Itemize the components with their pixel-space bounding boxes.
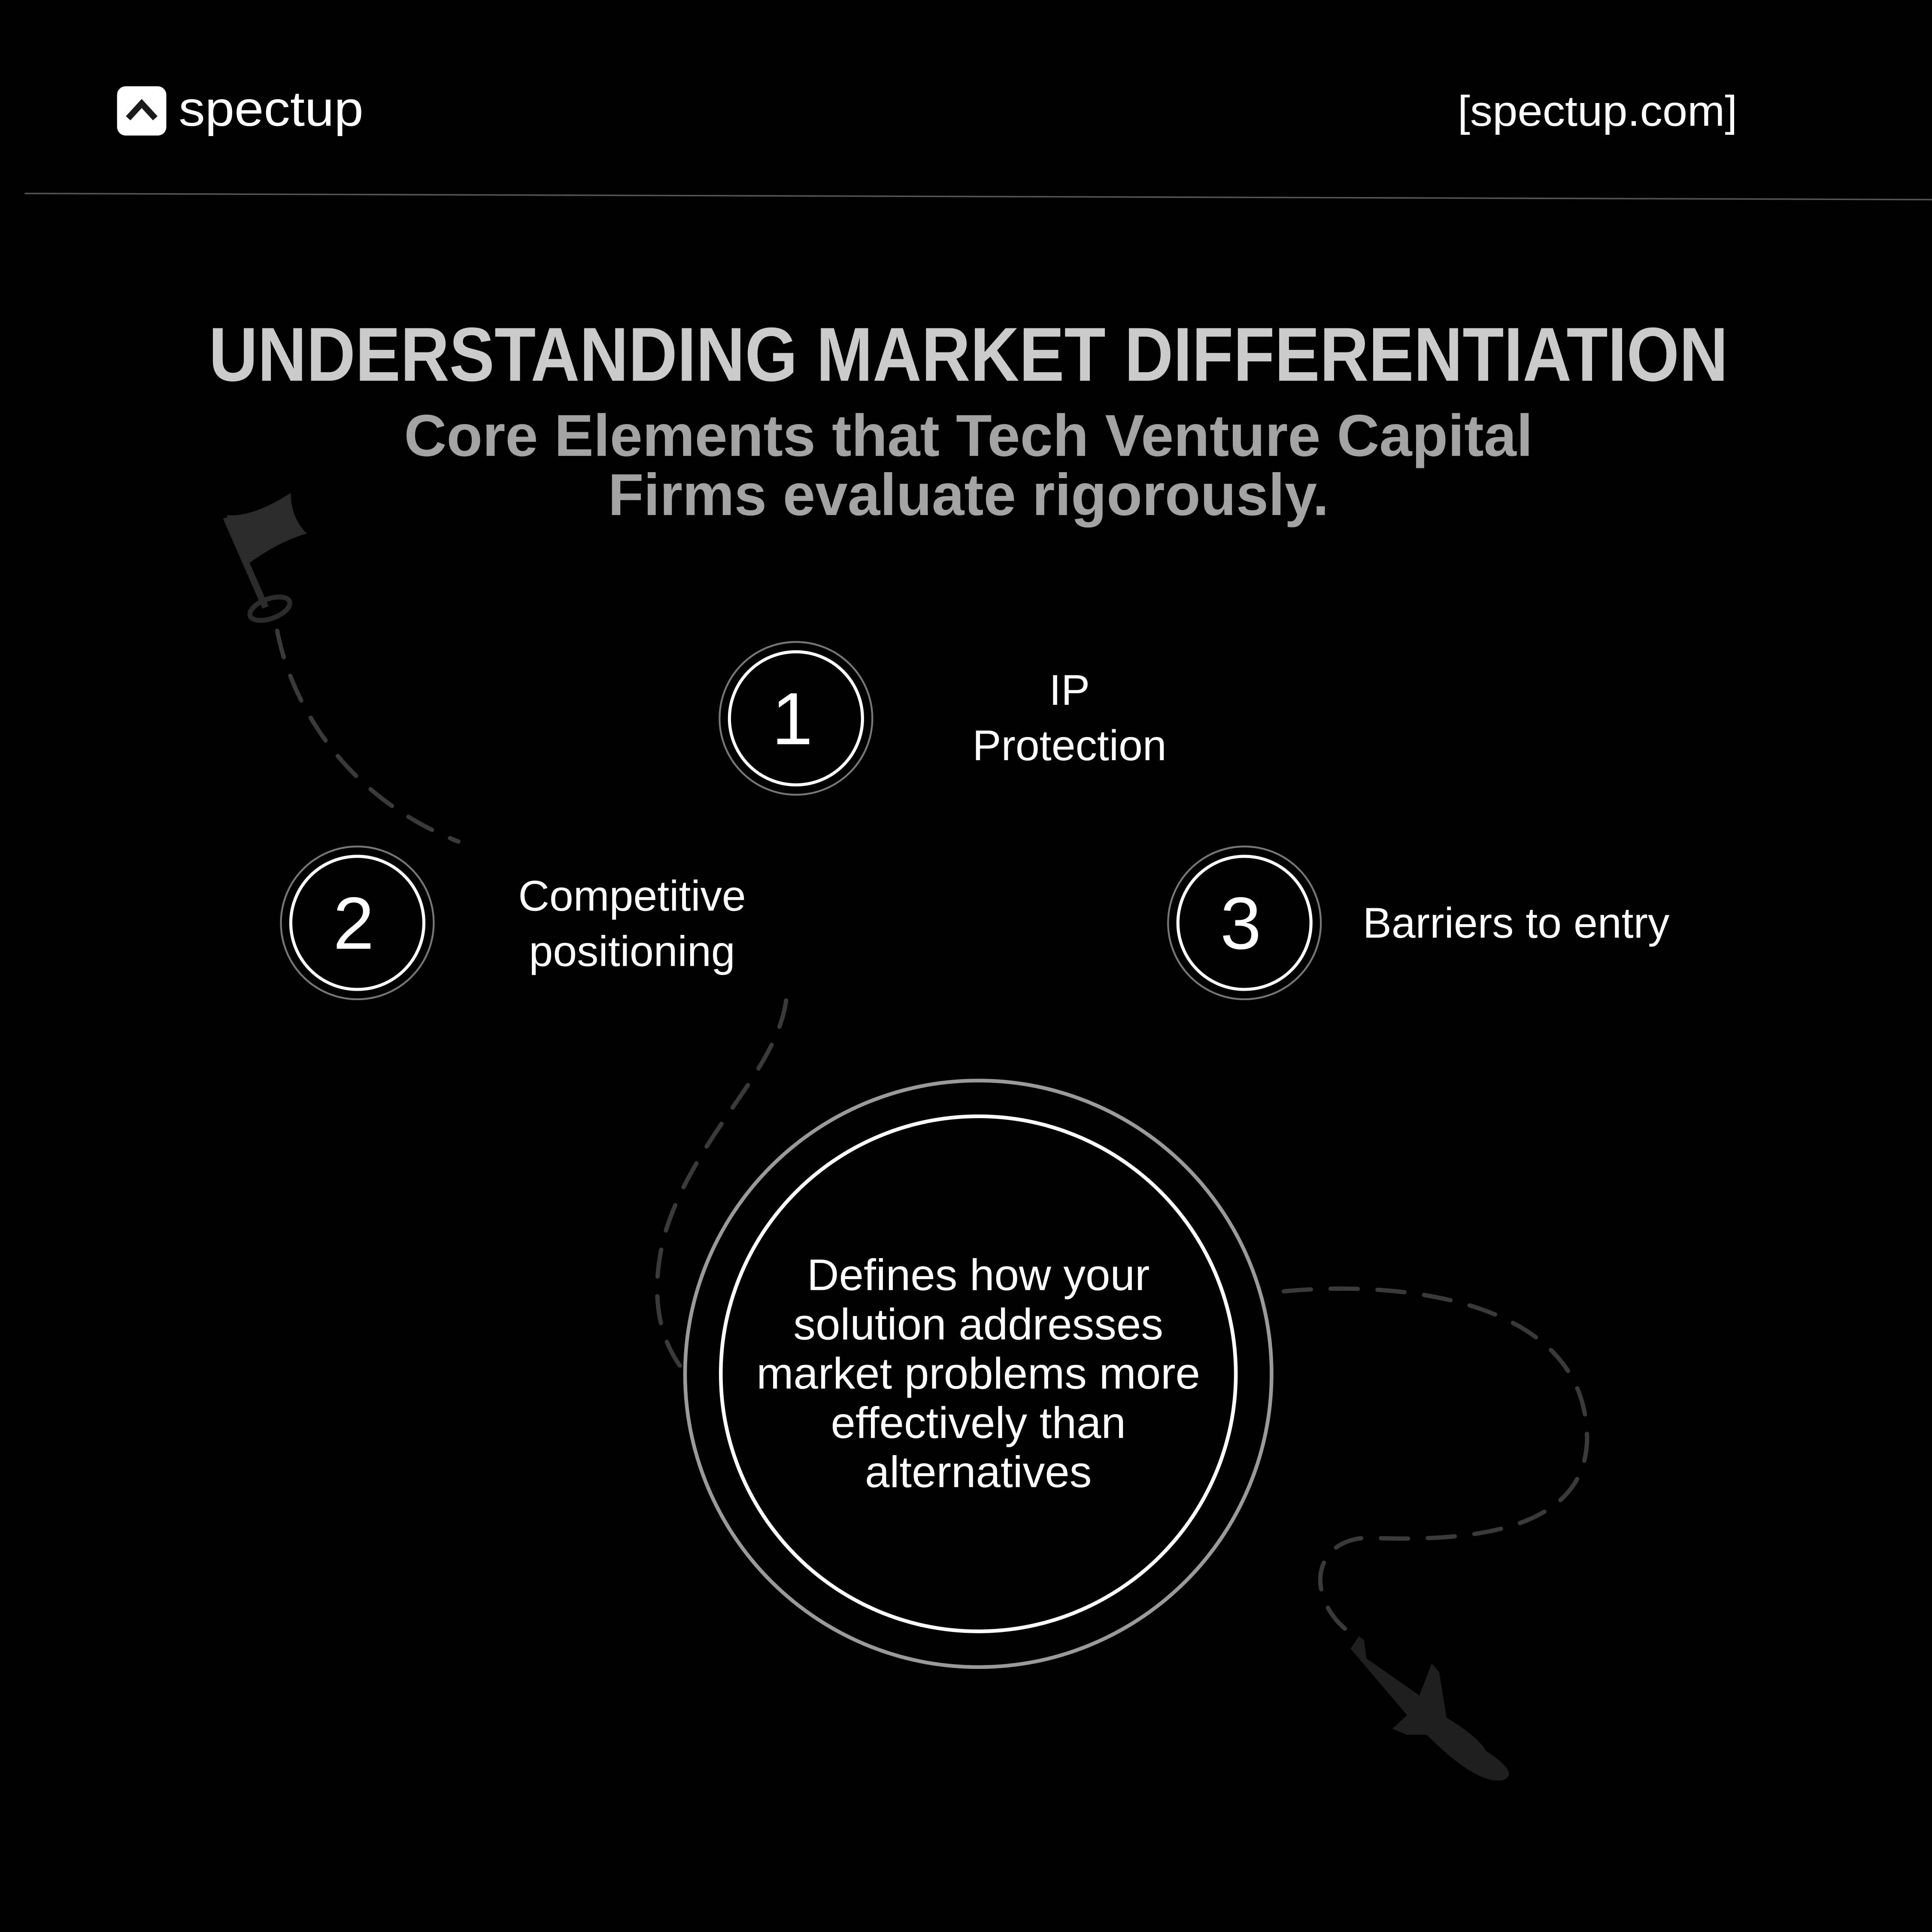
item 2: Competitive positioning: 2 — [333, 882, 374, 964]
item 3: Barriers to entry: Barriers to entry — [1363, 899, 1670, 947]
item 2: Competitive positioning — [281, 846, 746, 999]
subtitle: Core Elements that Tech Venture Capital — [404, 403, 1533, 469]
subtitle: Firms evaluate rigorously. — [608, 462, 1329, 528]
logo: spectup — [179, 82, 364, 136]
icon: flag — [223, 493, 307, 625]
icon: plane — [1350, 1636, 1509, 1781]
website url: [spectup.com] — [1458, 87, 1737, 135]
item 1: IP Protection — [719, 642, 1167, 795]
central circle: definition: alternatives — [865, 1447, 1092, 1497]
item 1: IP Protection: 1 — [772, 678, 813, 760]
item 3: Barriers to entry: 3 — [1220, 882, 1262, 964]
central circle: definition: market problems more — [756, 1348, 1200, 1398]
item 3: Barriers to entry — [1168, 846, 1670, 999]
central circle: definition: Defines how your — [807, 1250, 1149, 1299]
item 1: IP Protection: IP — [1049, 666, 1090, 714]
item 2: Competitive positioning: Competitive — [518, 872, 746, 920]
dashed path — [277, 631, 1587, 1639]
central circle: definition — [685, 1080, 1271, 1667]
central circle: definition: solution addresses — [793, 1299, 1163, 1349]
title: UNDERSTANDING MARKET DIFFERENTIATION — [209, 312, 1728, 397]
subtitle — [404, 403, 1533, 528]
item 2: Competitive positioning: positioning — [529, 928, 735, 976]
central circle: definition: effectively than — [831, 1398, 1126, 1447]
item 1: IP Protection: Protection — [972, 722, 1167, 770]
